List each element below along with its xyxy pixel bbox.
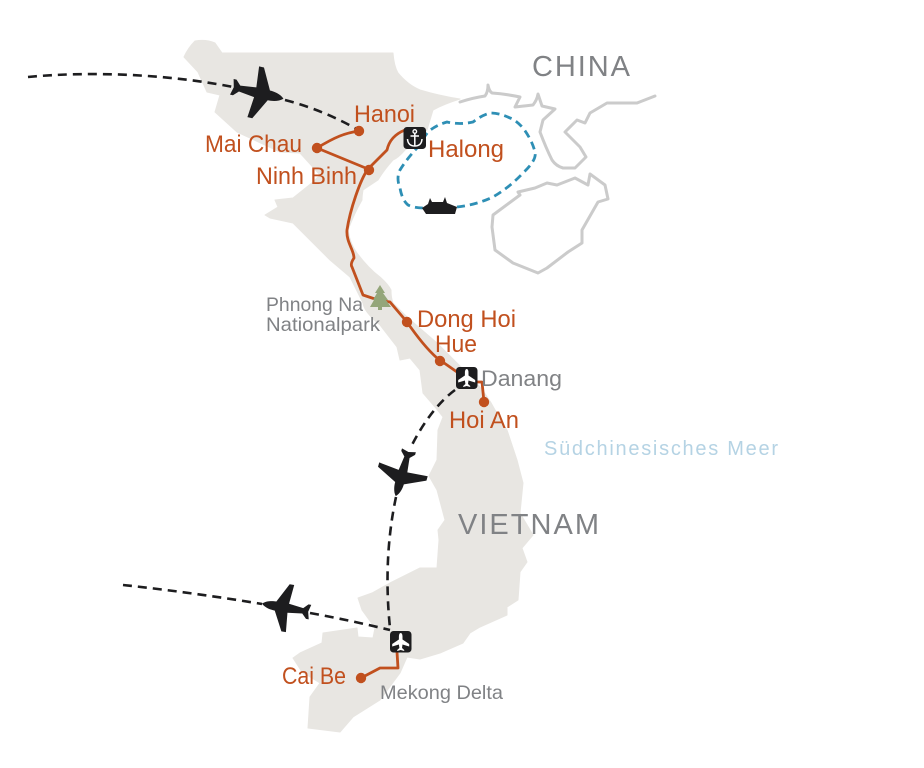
cruise route: Halong bay: [398, 113, 535, 208]
label: Hanoi: Hanoi: [354, 101, 415, 128]
label: Südchinesisches Meer: Südchinesisches Meer: [544, 438, 778, 460]
route: Hanoi, Mai Chau and Ninh Binh to Dong Hoi and Hue: [317, 130, 484, 678]
stop: Hoi An: [479, 397, 489, 407]
icon: national park tree: [370, 285, 391, 310]
label: Danang: Danang: [481, 366, 562, 391]
map: Vietnam land: [184, 40, 533, 732]
label: Dong Hoi: Dong Hoi: [417, 306, 516, 333]
icon: airplane north: [226, 61, 289, 124]
icon: ship: [422, 197, 457, 214]
stop: Ninh Binh: [364, 165, 374, 175]
label: CHINA: CHINA: [532, 51, 631, 83]
map: Hainan island outline: [492, 174, 608, 273]
label: Hue: Hue: [435, 331, 477, 358]
stop: Hanoi: [354, 126, 364, 136]
icon: Halong anchor: [404, 127, 426, 149]
stop: Hue: [435, 356, 445, 366]
map: China coastline: [460, 85, 655, 168]
icon: airplane centre: [372, 443, 433, 503]
label: Phnong Na Nationalpark: Nationalpark: [266, 314, 380, 336]
label: Ninh Binh: Ninh Binh: [256, 163, 357, 190]
stop: Mai Chau: [312, 143, 322, 153]
flight path: Saigon outbound: [123, 585, 390, 630]
label: Phnong Na Nationalpark: [266, 294, 380, 336]
icon: airplane south: [258, 580, 314, 636]
label: Halong: Halong: [428, 136, 504, 163]
stop: Dong Hoi: [402, 317, 412, 327]
label: Mai Chau: Mai Chau: [205, 131, 302, 158]
label: VIETNAM: VIETNAM: [458, 509, 599, 541]
flight path: Europe to Hanoi: [28, 74, 360, 131]
icon: Danang airport: [456, 367, 478, 389]
flight path: Danang to Saigon: [388, 390, 455, 628]
icon: Saigon airport: [390, 631, 412, 652]
label: Cai Be: Cai Be: [282, 663, 346, 690]
stop: Cai Be: [356, 673, 366, 683]
label: Hoi An: Hoi An: [449, 407, 519, 434]
label: Mekong Delta: Mekong Delta: [380, 682, 503, 704]
label: Phnong Na Nationalpark: Phnong Na: [266, 294, 363, 316]
